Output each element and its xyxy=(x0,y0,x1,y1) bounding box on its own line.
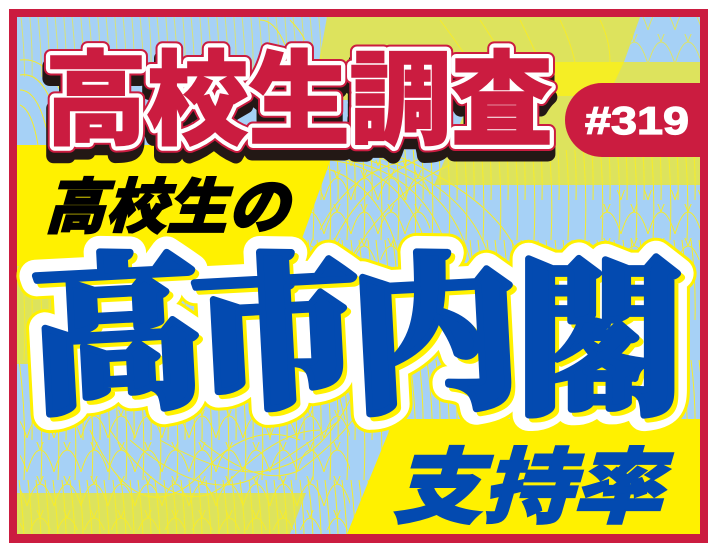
title: 高校生調査: 高校生調査 xyxy=(45,44,553,158)
badge: issue number xyxy=(565,83,700,157)
title: 高校生調査: 高校生調査 xyxy=(45,44,553,158)
badge: issue number: #319 xyxy=(585,100,689,143)
main heading: 高市内閣: 高市内閣 xyxy=(26,198,684,448)
main heading: 高市内閣: 高市内閣 xyxy=(26,198,684,448)
subheading: 高校生の: 高校生の xyxy=(40,174,303,241)
title: 高校生調査: 高校生調査 xyxy=(45,44,553,158)
title: 高校生調査: 高校生調査 xyxy=(44,54,552,168)
bright yellow panels xyxy=(17,145,700,534)
subheading: 支持率: 支持率 xyxy=(387,442,683,534)
main heading: 高市内閣: 高市内閣 xyxy=(30,202,688,452)
main heading: 高市内閣: 高市内閣 xyxy=(26,198,684,448)
